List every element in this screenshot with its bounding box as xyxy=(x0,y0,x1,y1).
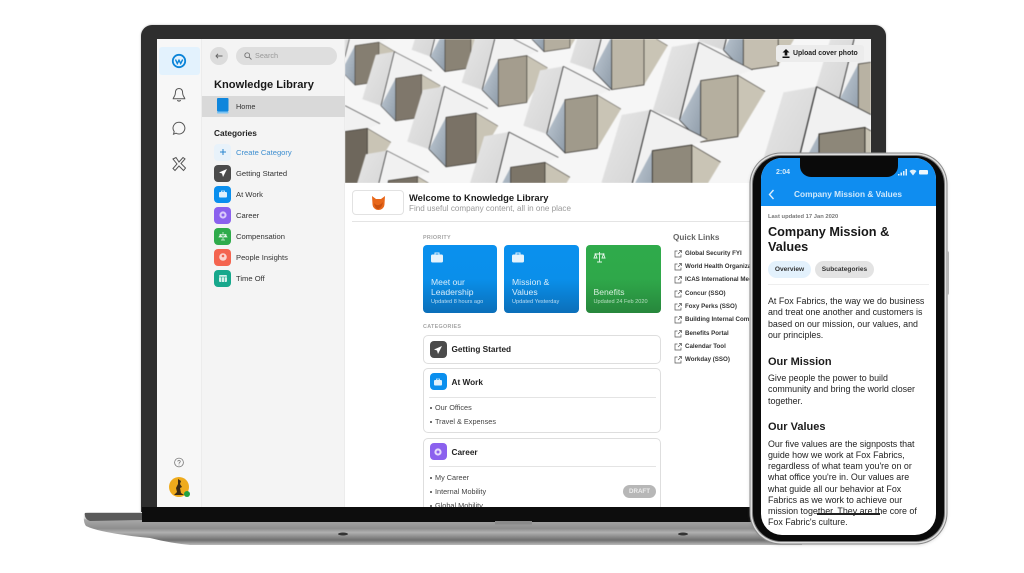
welcome subtitle: Find useful company content, all in one place xyxy=(409,204,571,213)
create category xyxy=(214,144,292,161)
welcome header xyxy=(352,190,750,222)
category card: at work xyxy=(423,368,661,433)
people insights: People Insights xyxy=(236,252,288,262)
time off xyxy=(214,270,265,287)
our values text: Fabrics as we work to achieve our xyxy=(768,495,902,505)
people insights xyxy=(214,249,288,266)
at work xyxy=(214,186,263,203)
intro paragraph: and treat one another and customers is xyxy=(768,307,922,317)
laptop screen xyxy=(157,39,871,507)
header title: Company Mission & Values xyxy=(794,189,902,199)
our values text: Fox Fabric's culture. xyxy=(768,517,848,527)
priority card: meet our leadership xyxy=(423,245,497,313)
at work: At Work xyxy=(236,190,263,198)
last updated: Last updated 17 Jan 2020 xyxy=(768,214,838,220)
our values text: what guide all our behavior at Fox xyxy=(768,484,901,494)
category card: getting started: Getting Started xyxy=(452,344,511,354)
intro paragraph xyxy=(768,296,924,340)
article title: Values xyxy=(768,240,808,254)
article title: Company Mission & xyxy=(768,224,889,238)
welcome title: Welcome to Knowledge Library xyxy=(409,192,548,202)
phone xyxy=(753,156,944,541)
our mission text: together. xyxy=(768,396,803,406)
status time: 2:04 xyxy=(776,169,790,176)
priority card: meet our leadership: Meet our xyxy=(431,277,465,287)
quick links heading: Quick Links xyxy=(673,233,719,242)
fox logo xyxy=(352,190,404,215)
category card: career: Career xyxy=(452,448,478,456)
category card: at work: At Work xyxy=(452,378,483,386)
career xyxy=(214,207,260,224)
phone side button xyxy=(946,250,948,294)
search field xyxy=(236,47,337,65)
intro paragraph: based on our mission, our values, and xyxy=(768,319,918,329)
quick links: Workday (SSO) xyxy=(685,356,730,363)
upload cover photo button: Upload cover photo xyxy=(793,50,858,56)
upload cover photo button xyxy=(776,45,864,62)
icon: book xyxy=(217,98,228,114)
our mission text xyxy=(768,373,915,406)
home row: Home xyxy=(236,102,255,110)
app header xyxy=(761,158,936,206)
status icons xyxy=(898,169,928,176)
our values text: mission together. They are the core of xyxy=(768,506,917,516)
our mission text: Give people the power to build xyxy=(768,373,888,383)
priority card: benefits: Updated 24 Feb 2020 xyxy=(594,299,648,305)
our mission heading: Our Mission xyxy=(768,356,832,368)
active workplace logo tab xyxy=(159,47,200,75)
priority card: mission and values xyxy=(504,245,579,313)
icon: tools xyxy=(172,156,186,172)
avatar with status dot xyxy=(169,477,190,497)
tab: subcategories: Subcategories xyxy=(822,266,867,273)
laptop xyxy=(84,24,887,545)
compensation xyxy=(214,228,285,245)
priority card: mission and values: Updated Yesterday xyxy=(512,299,559,305)
categories label: CATEGORIES xyxy=(423,324,461,330)
tab: overview: Overview xyxy=(775,266,804,273)
our values text: guide how we work at Fox Fabrics, xyxy=(768,450,905,460)
draft badge: DRAFT xyxy=(629,488,650,495)
category card: at work: Travel & Expenses xyxy=(435,417,496,426)
category card: career xyxy=(423,438,661,518)
notch xyxy=(800,158,898,177)
quick links: Benefits Portal xyxy=(685,330,729,337)
priority card: meet our leadership: Updated 8 hours ago xyxy=(431,299,483,305)
quick links: Concur (SSO) xyxy=(685,290,726,297)
categories heading: Categories xyxy=(214,128,257,138)
main content xyxy=(345,39,871,507)
phone screen xyxy=(761,158,936,535)
quick links: ICAS International Medical xyxy=(685,276,763,283)
getting started xyxy=(214,165,287,182)
category card: at work: Our Offices xyxy=(435,403,472,412)
back button xyxy=(210,47,228,65)
priority label: PRIORITY xyxy=(423,235,451,241)
icon rail xyxy=(157,39,201,507)
laptop lid bezel xyxy=(141,25,886,515)
our values text: regardless of what team you're on or xyxy=(768,461,912,471)
quick links: Building Internal Community xyxy=(685,316,770,323)
priority card: mission and values: Values xyxy=(512,286,538,296)
intro paragraph: our principles. xyxy=(768,330,823,340)
quick links: Global Security FYI xyxy=(685,250,742,257)
draft badge xyxy=(623,485,656,498)
getting started: Getting Started xyxy=(236,168,287,178)
search field: Search xyxy=(255,51,278,60)
icon: bell xyxy=(172,88,186,102)
our values text xyxy=(768,439,917,527)
sidebar heading: Knowledge Library xyxy=(214,78,314,90)
cover photo xyxy=(345,39,871,183)
time off: Time Off xyxy=(236,274,265,282)
icon: chat bubble xyxy=(172,122,186,135)
icon: help xyxy=(174,458,184,468)
priority card: benefits xyxy=(586,245,660,313)
quick links: World Health Organization xyxy=(685,263,763,270)
article title xyxy=(768,224,889,254)
back chevron xyxy=(768,190,774,200)
tab: overview xyxy=(768,261,811,278)
category card: career: Internal Mobility xyxy=(435,487,486,496)
our values text: Our five values are the signposts that xyxy=(768,439,915,449)
compensation: Compensation xyxy=(236,232,285,240)
category card: getting started xyxy=(423,335,661,364)
create category: Create Category xyxy=(236,148,292,156)
quick links: Foxy Perks (SSO) xyxy=(685,303,737,310)
quick links xyxy=(673,233,770,364)
priority card: benefits: Benefits xyxy=(594,286,625,296)
priority card: meet our leadership: Leadership xyxy=(431,286,474,296)
career: Career xyxy=(236,210,259,220)
quick links: Calendar Tool xyxy=(685,343,726,350)
our values heading: Our Values xyxy=(768,421,825,433)
category card: career: My Career xyxy=(435,473,469,482)
our values text: what office you're in. Our values are xyxy=(768,472,909,482)
our mission text: community and bring the world closer xyxy=(768,384,915,394)
home row xyxy=(202,96,345,117)
laptop base xyxy=(84,507,802,545)
priority card: mission and values: Mission & xyxy=(512,277,549,287)
intro paragraph: At Fox Fabrics, the way we do business xyxy=(768,296,924,306)
sidebar xyxy=(201,39,345,507)
tab: subcategories xyxy=(815,261,874,278)
